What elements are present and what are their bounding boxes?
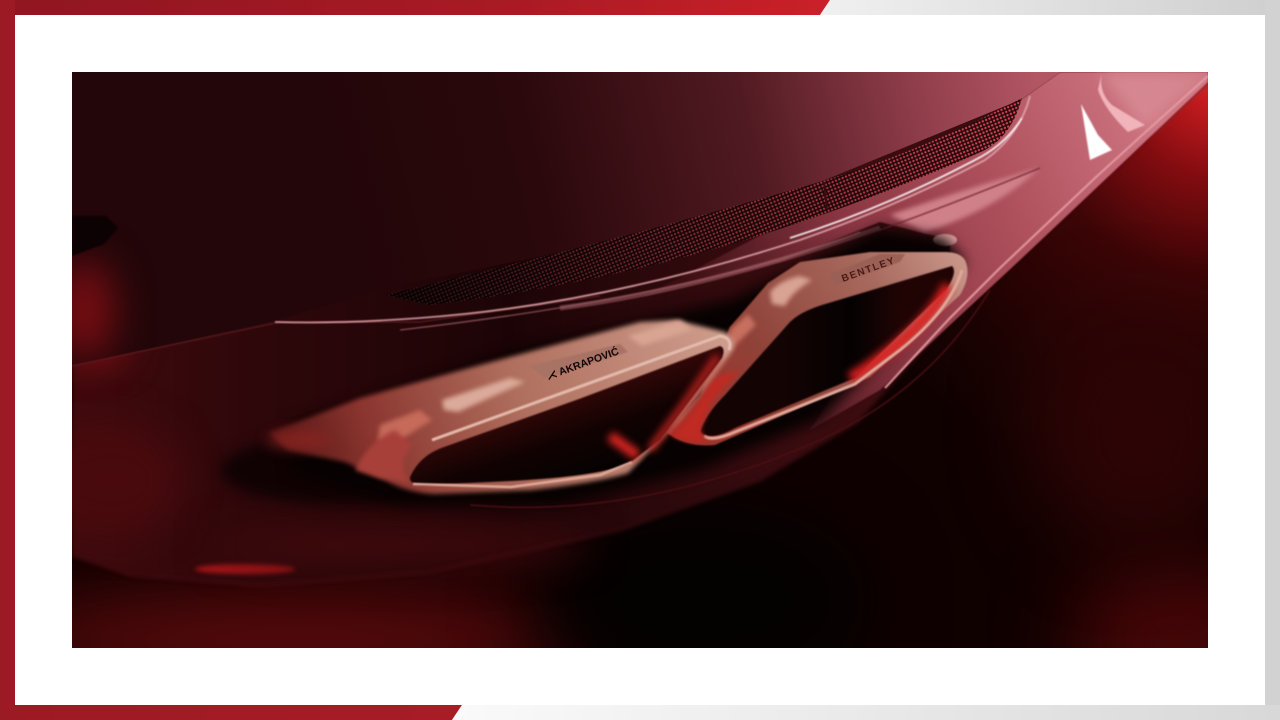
pink diffuser wedge [640,72,1208,430]
photo background [72,72,1208,648]
frame: left red bar [0,0,15,720]
grille mesh [385,98,1022,305]
frame: top red bar [0,0,830,15]
text: BENTLEY: BENTLEY [840,255,897,285]
text: AKRAPOVIC: ⋌ AKRAPOVIĆ [545,344,621,383]
side vent slot [72,216,118,256]
grille lower trim highlights [275,96,1030,330]
panel crease line [72,296,600,366]
frame: bottom grey bar [452,705,1280,720]
frame: bottom red bar [0,705,462,720]
exhaust tip: left [268,320,734,494]
shadow cavity behind tips [290,228,965,505]
frame: right grey bar [1265,0,1280,720]
photo: car exhaust [72,72,1208,648]
frame: top grey bar [820,0,1280,15]
exhaust tip: right [667,252,968,446]
outer diffuser line [470,290,990,507]
lower bumper body [40,72,1208,585]
left side panel glow [57,260,113,360]
upper body panel [72,72,1060,366]
